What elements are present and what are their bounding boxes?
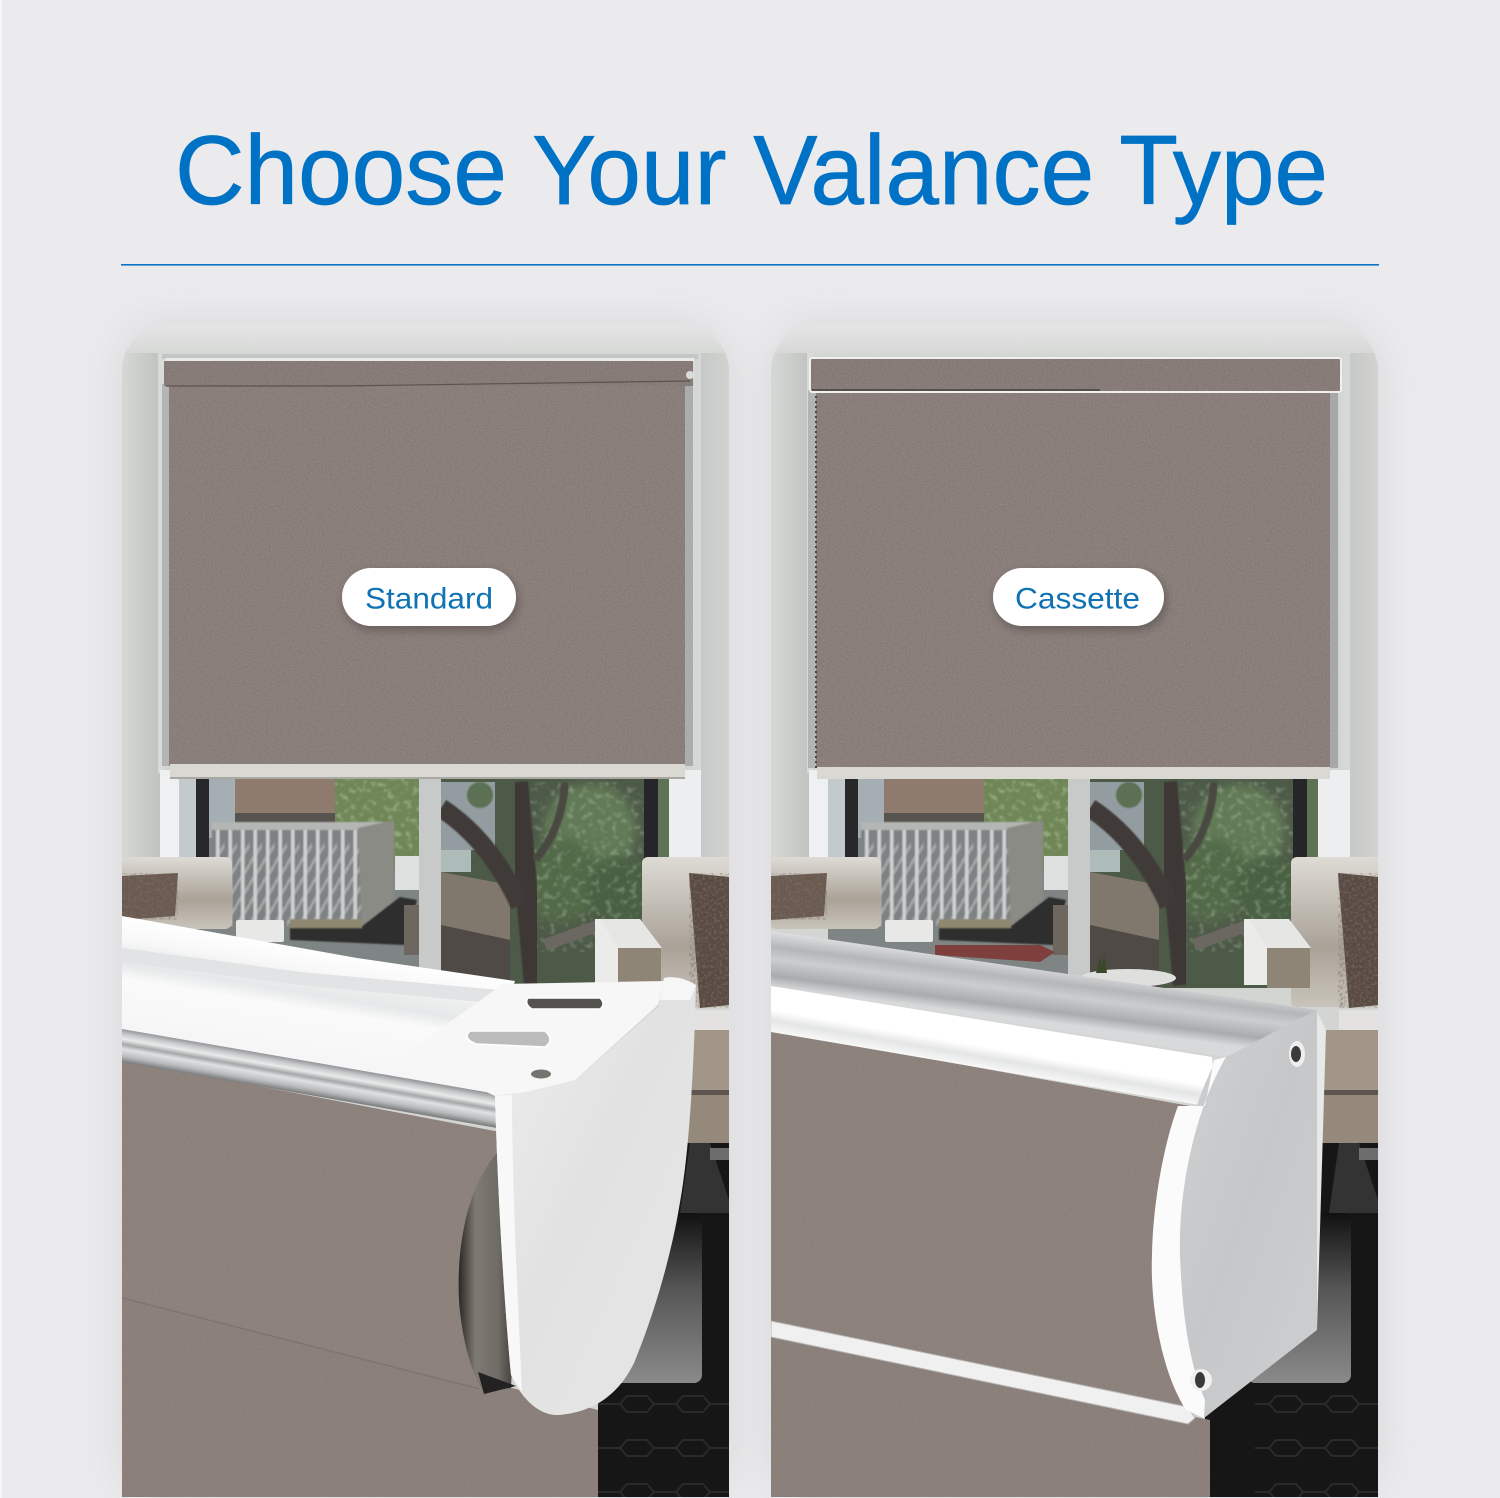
standard bracket: fabric behind: [122, 1060, 598, 1497]
standard label pill: [342, 568, 516, 626]
cassette bottom rail: [771, 1321, 1195, 1424]
cassette top rail: [771, 931, 1317, 1106]
window shade: cassette: [808, 358, 1341, 779]
window shade: standard: [162, 354, 698, 779]
title divider: [121, 264, 1379, 266]
cassette end cap: [1152, 1010, 1326, 1418]
side table and plant: [935, 945, 1176, 987]
cassette bracket: fabric: [771, 1030, 1210, 1497]
standard label pill: Standard: [365, 582, 493, 616]
panel: cassette valance: [769, 325, 1381, 1497]
room scene: [120, 325, 732, 1497]
title: Choose Your Valance Type: [175, 115, 1328, 225]
roller: [459, 1150, 515, 1392]
cassette label pill: [993, 568, 1164, 626]
standard aluminium rail: [122, 916, 515, 1128]
cassette label pill: Cassette: [1015, 582, 1140, 616]
room scene: [769, 325, 1381, 1497]
panel shadows: [122, 325, 1378, 1497]
standard end cap: [449, 977, 696, 1415]
panel: standard valance: [120, 325, 732, 1497]
rug continuation: [1205, 1383, 1255, 1497]
